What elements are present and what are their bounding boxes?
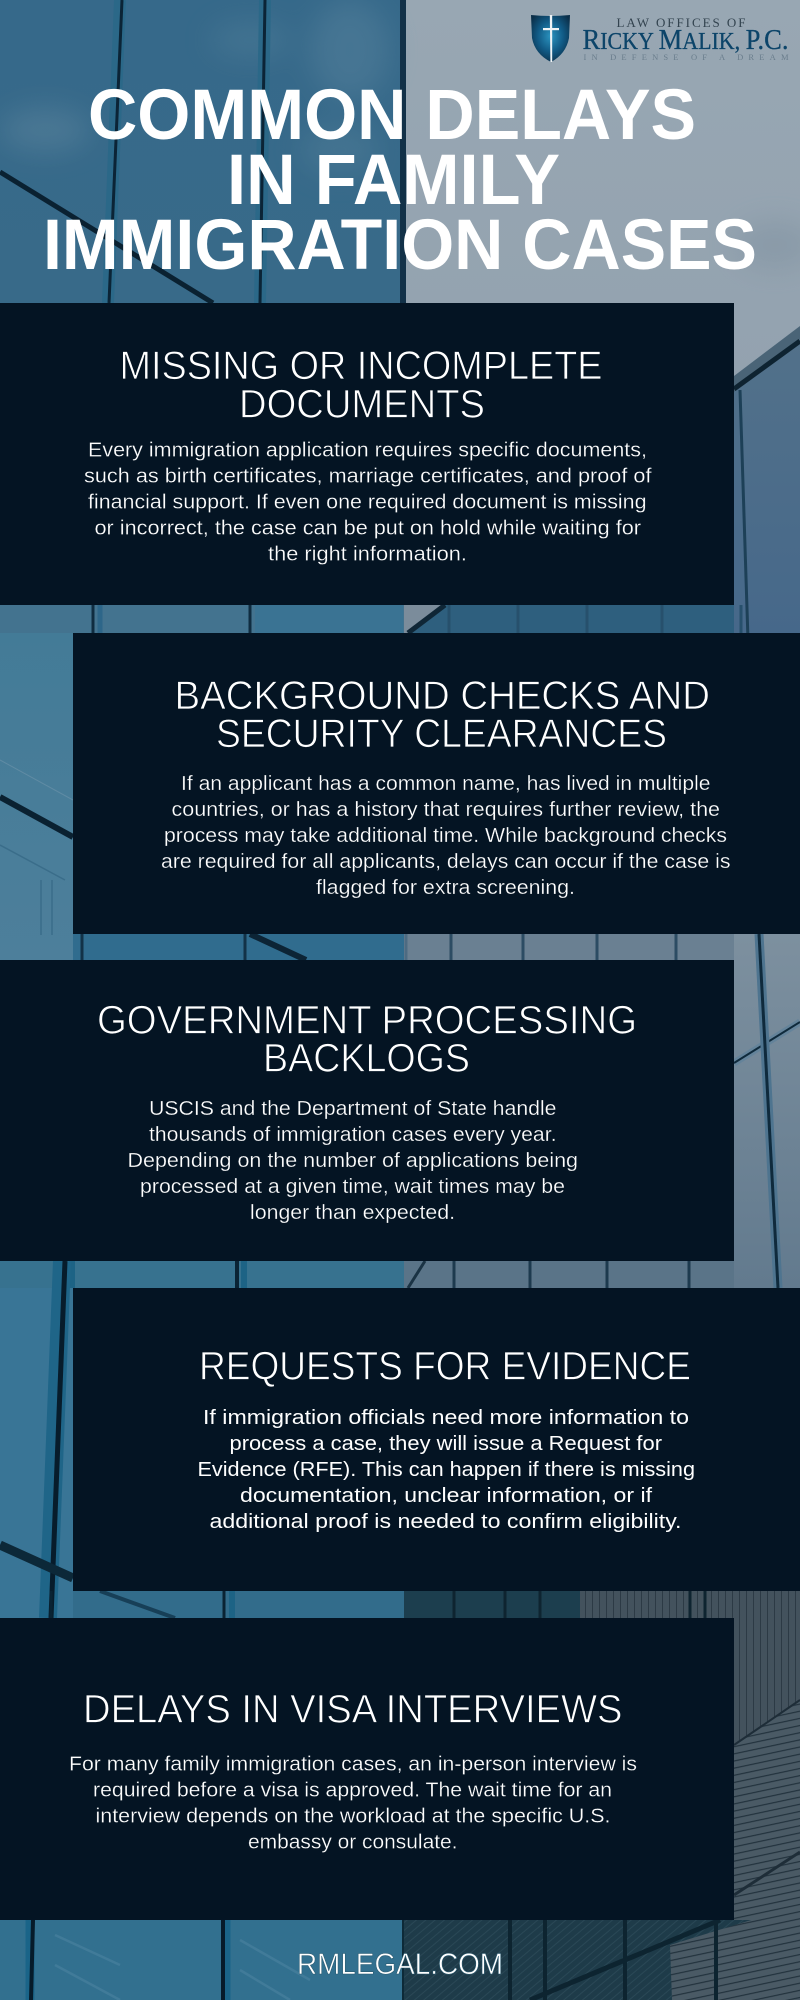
gap band 1591-1618 xyxy=(73,1591,404,1618)
bottom band right xyxy=(404,1920,800,2000)
logo text: tagline: IN DEFENSE OF A DREAM xyxy=(584,52,789,62)
bottom band left xyxy=(0,1920,404,2000)
heading: MISSING OR INCOMPLETE xyxy=(120,344,602,388)
body text: the right information. xyxy=(268,544,467,566)
title xyxy=(43,76,757,285)
right strip upper xyxy=(734,337,800,640)
body text: process may take additional time. While background checks xyxy=(164,825,727,847)
left strip 1288-1618 xyxy=(0,1288,73,1618)
top left blue glass xyxy=(0,0,404,640)
right strip 934-1288 xyxy=(734,934,800,1288)
heading: DELAYS IN VISA INTERVIEWS xyxy=(83,1688,622,1732)
body text: such as birth certificates, marriage certificates, and proof of xyxy=(84,466,652,488)
body text: Evidence (RFE). This can happen if there is missing xyxy=(198,1459,695,1481)
title: COMMON DELAYS xyxy=(88,76,696,155)
body text xyxy=(69,1754,637,1854)
heading: REQUESTS FOR EVIDENCE xyxy=(199,1344,691,1388)
body text: For many family immigration cases, an in-person interview is xyxy=(69,1754,637,1776)
logo text: law offices of: LAW OFFICES OF xyxy=(616,15,746,30)
body text: If an applicant has a common name, has lived in multiple xyxy=(181,773,710,795)
body text: longer than expected. xyxy=(250,1202,455,1224)
top right sky xyxy=(404,0,800,390)
left strip 633-960 xyxy=(0,633,73,960)
body text: If immigration officials need more information to xyxy=(203,1407,689,1429)
heading: BACKLOGS xyxy=(263,1036,470,1080)
body text xyxy=(84,440,652,566)
heading: DOCUMENTS xyxy=(239,382,485,426)
logo text: firm name: RICKY MALIK, P.C. xyxy=(582,24,788,56)
heading: SECURITY CLEARANCES xyxy=(216,712,667,756)
panel: missing or incomplete documents xyxy=(0,303,734,605)
gap band 934-960 xyxy=(73,934,404,960)
body text: flagged for extra screening. xyxy=(316,877,575,899)
body text: documentation, unclear information, or if xyxy=(240,1485,653,1507)
heading: GOVERNMENT PROCESSING xyxy=(97,998,637,1042)
body text: financial support. If even one required document is missing xyxy=(88,492,646,514)
right strip lower xyxy=(734,1590,800,2000)
body text: are required for all applicants, delays can occur if the case is xyxy=(161,851,730,873)
panel: delays in visa interviews xyxy=(0,1618,734,1920)
body text: interview depends on the workload at the specific U.S. xyxy=(96,1806,610,1828)
body text: Depending on the number of applications being xyxy=(128,1150,578,1172)
gap band 605-633 xyxy=(0,605,404,633)
body text: process a case, they will issue a Request for xyxy=(230,1433,662,1455)
body text: embassy or consulate. xyxy=(248,1832,458,1854)
body text: additional proof is needed to confirm eligibility. xyxy=(210,1511,682,1533)
body text: or incorrect, the case can be put on hold while waiting for xyxy=(94,518,641,540)
body text: processed at a given time, wait times may be xyxy=(140,1176,565,1198)
body text: thousands of immigration cases every year. xyxy=(149,1124,556,1146)
title: IMMIGRATION CASES xyxy=(43,206,757,285)
panel: background checks and security clearances xyxy=(73,633,800,934)
body text xyxy=(161,773,730,899)
title: IN FAMILY xyxy=(227,141,560,220)
heading xyxy=(120,344,602,426)
heading xyxy=(174,674,710,756)
panel: government processing backlogs xyxy=(0,960,734,1261)
icon: shield with sword xyxy=(531,15,570,62)
body text: USCIS and the Department of State handle xyxy=(149,1098,556,1120)
footer: website: RMLEGAL.COM xyxy=(297,1948,503,1981)
body text: Every immigration application requires specific documents, xyxy=(88,440,647,462)
body text xyxy=(128,1098,578,1224)
logo xyxy=(531,15,789,62)
heading: BACKGROUND CHECKS AND xyxy=(174,674,710,718)
gap band 1261-1288 xyxy=(0,1261,404,1288)
body text xyxy=(198,1407,695,1533)
body text: countries, or has a history that requires further review, the xyxy=(172,799,720,821)
panel: requests for evidence xyxy=(73,1288,800,1591)
body text: required before a visa is approved. The wait time for an xyxy=(93,1780,612,1802)
heading xyxy=(97,998,637,1080)
